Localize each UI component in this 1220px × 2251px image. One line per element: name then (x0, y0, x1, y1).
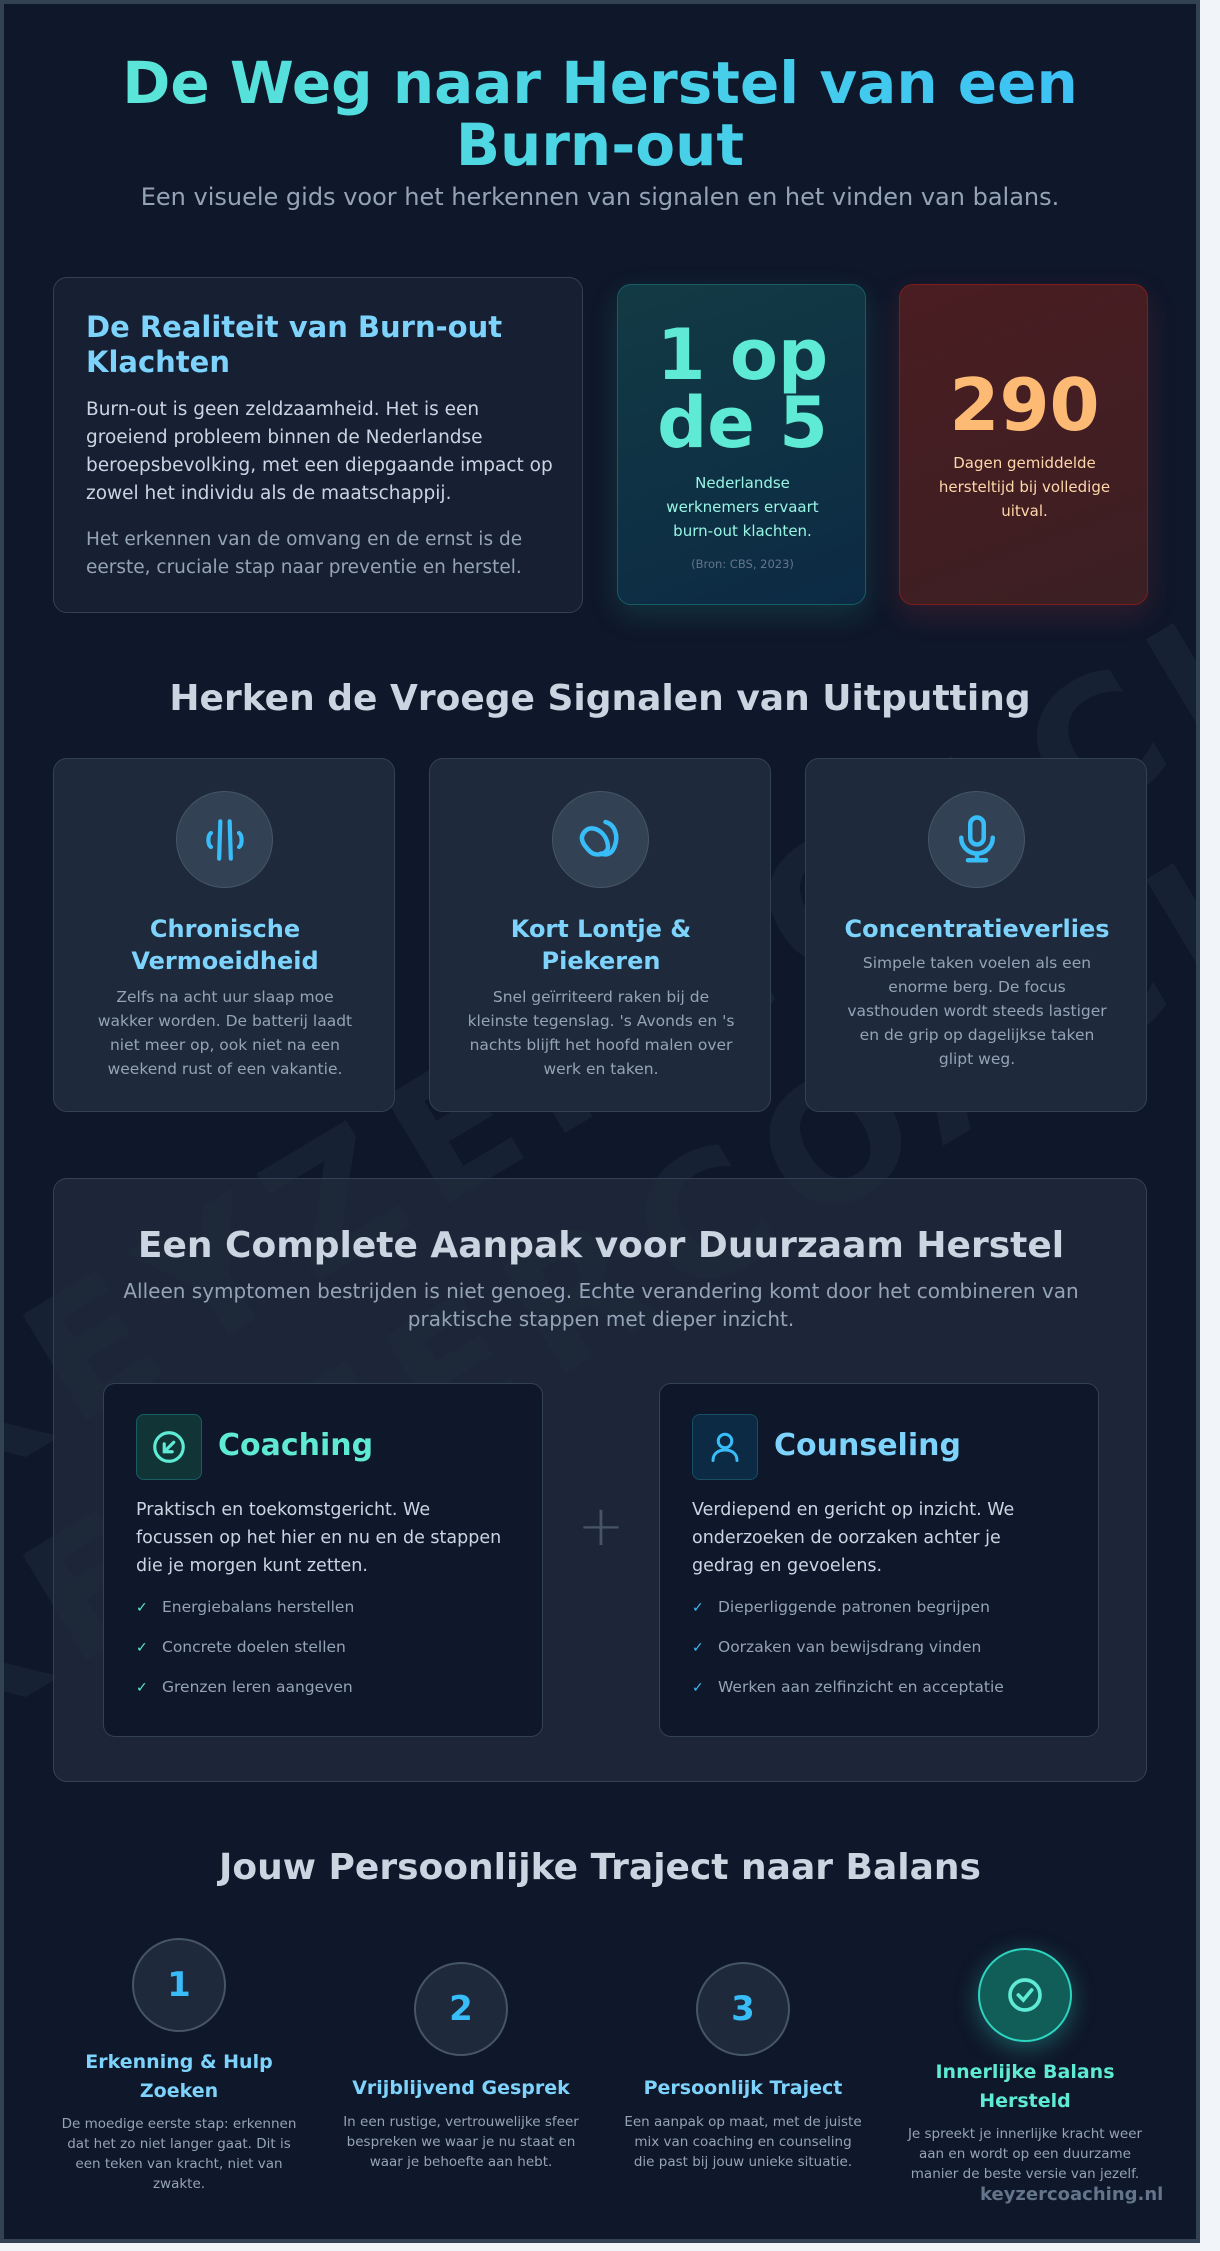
list: coaching: Energiebalans herstellen (162, 1598, 354, 1616)
heading: reality: De Realiteit van Burn-out Klachten (86, 310, 502, 379)
step 4: Hersteld (979, 2090, 1071, 2112)
panel: reality (53, 277, 583, 613)
text: reality note: Het erkennen van de omvang en de ernst is de eerste, cruciale stap naar preventie en herstel. (86, 529, 522, 578)
list: coaching: ✓ (136, 1640, 148, 1656)
step 1: 1 (167, 1965, 191, 2005)
subtitle: Een visuele gids voor het herkennen van signalen en het vinden van balans. (141, 183, 1059, 211)
title (4, 52, 1196, 176)
panel: counseling: Verdiepend en gericht op inzicht. We onderzoeken de oorzaken achter je gedrag en gevoelens. (692, 1500, 1014, 1576)
panel: signal 1: Vermoeidheid (131, 947, 319, 975)
step 1: Zoeken (140, 2080, 218, 2102)
step 3 (624, 1962, 862, 2170)
title: Burn-out (456, 111, 744, 179)
heading: approach: Een Complete Aanpak voor Duurzaam Herstel (138, 1225, 1064, 1266)
panel: coaching: Coaching (218, 1428, 373, 1463)
panel: coaching: focussen op het hier en nu en de stappen die je morgen kunt zetten. (136, 1528, 501, 1576)
step 2: In een rustige, vertrouwelijke sfeer bespreken we waar je nu staat en waar je behoefte aan hebt. (343, 2114, 579, 2170)
panel: signal 3: Simpele taken voelen als een enorme berg. De focus vasthouden wordt steeds lastiger en de grip op dagelijkse taken glipt weg. (847, 954, 1107, 1068)
panel: signal 2: Kort Lontje & (511, 915, 691, 943)
stat: 1 op de 5: 1 op (657, 314, 828, 396)
stat: 1 op de 5: (Bron: CBS, 2023) (691, 557, 794, 571)
list: counseling (692, 1598, 1004, 1696)
stat: 1 op de 5: Nederlandse werknemers ervaart burn-out klachten. (666, 474, 819, 540)
list: coaching (136, 1598, 354, 1696)
list: counseling: ✓ (692, 1600, 704, 1616)
title: De Weg naar Herstel van een (122, 49, 1078, 117)
list: coaching: Grenzen leren aangeven (162, 1678, 353, 1696)
icon: coaching (136, 1414, 202, 1480)
step 4 (907, 1943, 1142, 2182)
panel: signal 1: Zelfs na acht uur slaap moe wakker worden. De batterij laadt niet meer op, ook niet na een weekend rust of een vakantie. (98, 988, 352, 1078)
list: coaching: ✓ (136, 1600, 148, 1616)
list: coaching: Concrete doelen stellen (162, 1638, 346, 1656)
step 3: 3 (731, 1989, 755, 2029)
step 1 (62, 1938, 296, 2192)
list: counseling: Werken aan zelfinzicht en acceptatie (718, 1678, 1004, 1696)
panel: coaching (103, 1383, 543, 1737)
stat: 290 (899, 284, 1148, 605)
icon: fatigue (176, 791, 273, 888)
step 2 (343, 1962, 579, 2170)
list: counseling: ✓ (692, 1640, 704, 1656)
panel: signal 1 (53, 758, 395, 1112)
panel: counseling (659, 1383, 1099, 1737)
heading: journey: Jouw Persoonlijke Traject naar Balans (219, 1847, 981, 1888)
step 1: Erkenning & Hulp (85, 2051, 273, 2073)
list: counseling: ✓ (692, 1680, 704, 1696)
brand: keyzercoaching.nl (980, 2184, 1163, 2205)
panel: signal 2: Piekeren (542, 947, 660, 975)
stat: 290: 290 (949, 363, 1100, 447)
heading: signals: Herken de Vroege Signalen van Uitputting (169, 678, 1031, 719)
list: counseling: Oorzaken van bewijsdrang vinden (718, 1638, 981, 1656)
step 3: Een aanpak op maat, met de juiste mix van coaching en counseling die past bij jouw unieke situatie. (624, 2114, 862, 2170)
list: counseling: Dieperliggende patronen begrijpen (718, 1598, 990, 1616)
panel: signal 3: Concentratieverlies (844, 915, 1110, 943)
panel: counseling: Counseling (774, 1428, 961, 1463)
icon: worry (552, 791, 649, 888)
step 2: Vrijblijvend Gesprek (352, 2077, 570, 2099)
step 1: De moedige eerste stap: erkennen dat het zo niet langer gaat. Dit is een teken van kracht, niet van zwakte. (62, 2116, 296, 2192)
step 3: Persoonlijk Traject (644, 2077, 842, 2099)
panel: signal 1: Chronische (150, 915, 300, 943)
stat: 1 op de 5: de 5 (657, 382, 828, 464)
step 4: Innerlijke Balans (935, 2061, 1114, 2083)
stat: 1 op de 5 (617, 284, 866, 605)
text: reality body: Burn-out is geen zeldzaamheid. Het is een groeiend probleem binnen de Nederlandse beroepsbevolking, met een diepgaande impact op zowel het individu als de maatschappij. (86, 399, 553, 504)
icon: plus: + (578, 1494, 624, 1559)
panel: coaching: Praktisch en toekomstgericht. We (136, 1500, 430, 1520)
icon: microphone (928, 791, 1025, 888)
panel: signal 2 (429, 758, 771, 1112)
panel: approach (53, 1178, 1147, 1782)
stat: 290: Dagen gemiddelde hersteltijd bij volledige uitval. (939, 454, 1110, 520)
icon: counseling (692, 1414, 758, 1480)
text: approach intro: Alleen symptomen bestrijden is niet genoeg. Echte verandering komt door het combineren van praktische stappen met dieper inzicht. (123, 1279, 1079, 1331)
list: coaching: ✓ (136, 1680, 148, 1696)
panel: signal 2: Snel geïrriteerd raken bij de kleinste tegenslag. 's Avonds en 's nachts blijft het hoofd malen over werk en taken. (468, 988, 734, 1078)
step 2: 2 (449, 1989, 473, 2029)
panel: signal 3 (805, 758, 1147, 1112)
step 4: Je spreekt je innerlijke kracht weer aan en wordt op een duurzame manier de beste versie van jezelf. (908, 2126, 1142, 2182)
